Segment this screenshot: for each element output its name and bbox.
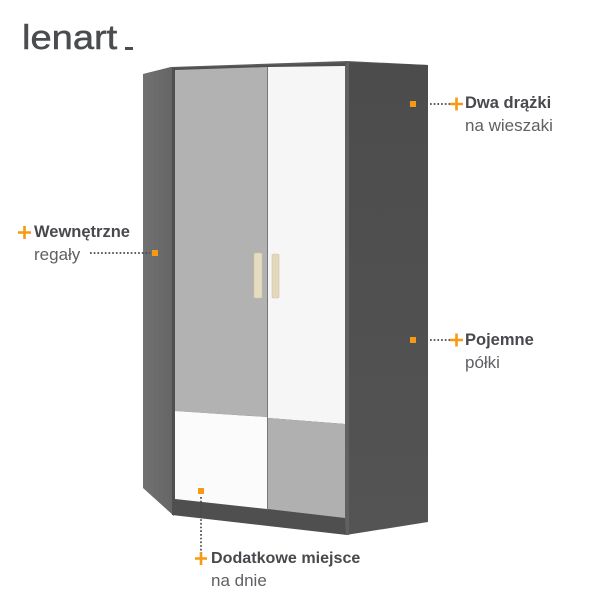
label: Wewnętrzne: Wewnętrzne [34,223,130,241]
label: Pojemne [465,331,534,372]
wardrobe front frame [172,63,347,535]
marker: dwa drazki [410,98,463,110]
wardrobe left side panel [143,68,174,516]
label: Pojemne: Pojemne [465,331,534,349]
label: Dwa drążki: na wieszaki [465,116,553,134]
door: lower left white [175,411,267,509]
marker: wewnetrzne [18,226,158,256]
marker: pojemne [410,334,463,346]
label: Wewnętrzne: regały [34,244,80,264]
wardrobe top [143,61,428,74]
wardrobe right side panel [346,62,428,535]
label: Dodatkowe miejsce [211,549,360,590]
label: Dwa drążki [465,94,553,134]
handle: right [272,254,279,298]
right panel edge [345,62,349,535]
logo: lenart: lenart [22,18,117,56]
handle: left [254,253,262,298]
label: Pojemne: półki [465,352,500,372]
door: upper right white [268,66,345,424]
door: upper left grey [175,67,268,417]
label: Dodatkowe miejsce: Dodatkowe miejsce [211,549,360,567]
marker: dodatkowe [195,488,207,565]
door gap [266,67,268,510]
label: Dodatkowe miejsce: na dnie [211,570,267,590]
label: Wewnętrzne [34,223,130,264]
label: Dwa drążki: Dwa drążki [465,94,551,112]
door: lower right grey [268,418,345,518]
